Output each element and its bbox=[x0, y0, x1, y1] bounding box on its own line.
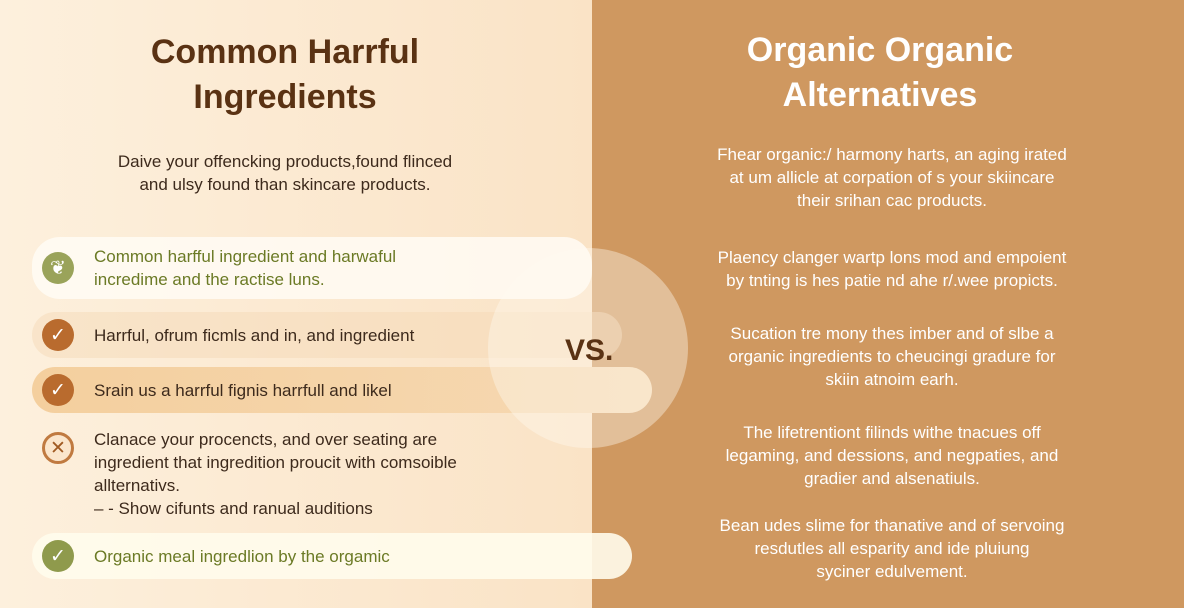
right item 3: legaming, and dessions, and negpaties, and bbox=[726, 446, 1058, 465]
vs label: VS. bbox=[565, 334, 613, 367]
icon: leaf: ❦ bbox=[50, 258, 66, 278]
intro text: left bbox=[118, 152, 452, 194]
right item 2: skiin atnoim earh. bbox=[825, 370, 959, 389]
intro text: right: Fhear organic:/ harmony harts, an aging irated bbox=[717, 145, 1067, 164]
right item 4 bbox=[720, 516, 1064, 581]
row 4: allternativs. bbox=[94, 476, 180, 495]
row 2 bbox=[32, 312, 622, 358]
right item 4: syciner edulvement. bbox=[816, 562, 968, 581]
row 4 bbox=[42, 430, 457, 518]
right item 2: organic ingredients to cheucingi gradure for bbox=[728, 347, 1055, 366]
right item 4: resdutles all esparity and ide pluiung bbox=[754, 539, 1030, 558]
intro text: left: and ulsy found than skincare products. bbox=[139, 175, 431, 194]
icon: check bbox=[42, 319, 74, 351]
intro text: left: Daive your offencking products,found flinced bbox=[118, 152, 452, 171]
title: right bbox=[747, 31, 1013, 114]
title: left: Common Harrful bbox=[151, 33, 419, 71]
row 3 bbox=[32, 367, 652, 413]
icon: cross: ✕ bbox=[50, 438, 66, 458]
icon: check bbox=[42, 374, 74, 406]
right item 3 bbox=[726, 423, 1058, 488]
title: left bbox=[151, 33, 419, 116]
row 4: Clanace your procencts, and over seating are bbox=[94, 430, 437, 449]
row 2: Harrful, ofrum ficmls and in, and ingredient bbox=[94, 326, 414, 344]
row 4: ingredient that ingredition proucit with comsoible bbox=[94, 453, 457, 472]
title: right: Alternatives bbox=[783, 76, 977, 114]
right item 3: The lifetrentiont filinds withe tnacues off bbox=[743, 423, 1041, 442]
row 3: Srain us a harrful fignis harrfull and likel bbox=[94, 380, 392, 400]
right item 4: Bean udes slime for thanative and of servoing bbox=[720, 516, 1064, 535]
right item 3: gradier and alsenatiuls. bbox=[804, 469, 980, 488]
icon: check green bbox=[42, 540, 74, 572]
intro text: right bbox=[717, 145, 1067, 210]
right item 1: Plaency clanger wartp lons mod and empoient bbox=[718, 248, 1066, 267]
icon: check: ✓ bbox=[50, 380, 66, 400]
right item 2: Sucation tre mony thes imber and of slbe a bbox=[730, 324, 1054, 343]
right item 1 bbox=[718, 248, 1066, 290]
intro text: right: their srihan cac products. bbox=[797, 191, 987, 210]
icon: check green: ✓ bbox=[50, 546, 66, 566]
icon: leaf bbox=[42, 252, 74, 284]
title: left: Ingredients bbox=[193, 78, 377, 116]
row 5: Organic meal ingredlion by the orgamic bbox=[94, 546, 390, 566]
icon: cross bbox=[42, 432, 74, 464]
row 1: Common harfful ingredient and harwaful bbox=[94, 247, 396, 266]
right item 2 bbox=[728, 324, 1056, 389]
intro text: right: at um allicle at corpation of s your skiincare bbox=[729, 168, 1055, 187]
icon: check: ✓ bbox=[50, 324, 66, 346]
vs circle bbox=[488, 248, 688, 448]
right item 1: by tnting is hes patie nd ahe r/.wee propicts. bbox=[726, 271, 1058, 290]
title: right: Organic Organic bbox=[747, 31, 1013, 69]
row 4: – - Show cifunts and ranual auditions bbox=[94, 499, 373, 518]
row 1: incredime and the ractise luns. bbox=[94, 270, 325, 289]
row 1 bbox=[32, 237, 592, 299]
row 5 bbox=[32, 533, 632, 579]
